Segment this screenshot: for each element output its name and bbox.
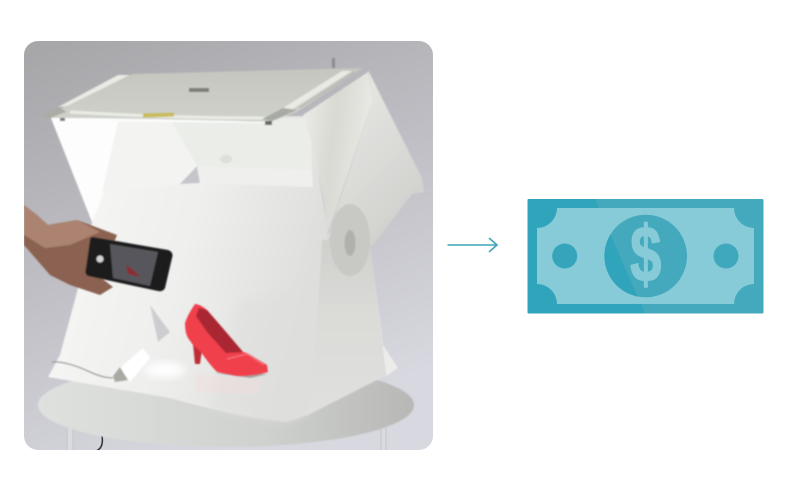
back wall notch [180, 166, 200, 184]
shoe interior [196, 308, 243, 353]
upper back wall [103, 160, 110, 191]
table legs [66, 426, 386, 450]
lid logo [189, 88, 209, 92]
banknote inner panel [537, 208, 754, 304]
shoe toe highlight [227, 354, 264, 365]
right dot [714, 244, 738, 268]
arm [24, 220, 118, 296]
round table [38, 380, 414, 447]
lower flap [380, 322, 398, 376]
centre circle [604, 215, 687, 297]
banknote base [528, 199, 764, 314]
lid feet [60, 118, 65, 121]
floor glow [145, 363, 185, 377]
shoe reflection [195, 374, 262, 395]
lid label [143, 112, 174, 118]
side wall disc [330, 204, 370, 276]
shoe body [185, 304, 268, 376]
left fold triangle [150, 305, 170, 342]
lid screw knob [332, 58, 335, 68]
hand holding phone [24, 205, 172, 295]
phone screen [110, 244, 158, 286]
right outer panel [327, 70, 424, 245]
lid highlights [58, 75, 130, 107]
floor shade [210, 280, 322, 422]
left dot [552, 244, 577, 268]
shoe shadow [215, 373, 268, 378]
lid light strip [94, 120, 265, 123]
photo background [24, 41, 433, 450]
LED light [52, 348, 150, 382]
red shoe [184, 303, 269, 378]
phone body [85, 237, 172, 291]
interior base [48, 116, 330, 422]
wall mount [220, 154, 232, 164]
arrow [448, 238, 497, 252]
light box [40, 58, 424, 422]
front panel [308, 240, 385, 415]
lid top [40, 68, 363, 122]
lid corners [41, 108, 66, 118]
phone camera [96, 256, 104, 262]
back wall fold [270, 170, 312, 187]
dollar sign: $ [630, 209, 661, 298]
infographic: photo studio box leads to money [24, 41, 764, 450]
table cable [96, 436, 102, 451]
centre circle darker part [590, 199, 645, 314]
icon: banknote [528, 199, 764, 314]
banknote darker left area [528, 199, 645, 314]
shoe heel [192, 344, 202, 365]
photo: light box with red shoe [24, 41, 433, 455]
left wall [69, 122, 116, 220]
right light panel [303, 72, 373, 235]
